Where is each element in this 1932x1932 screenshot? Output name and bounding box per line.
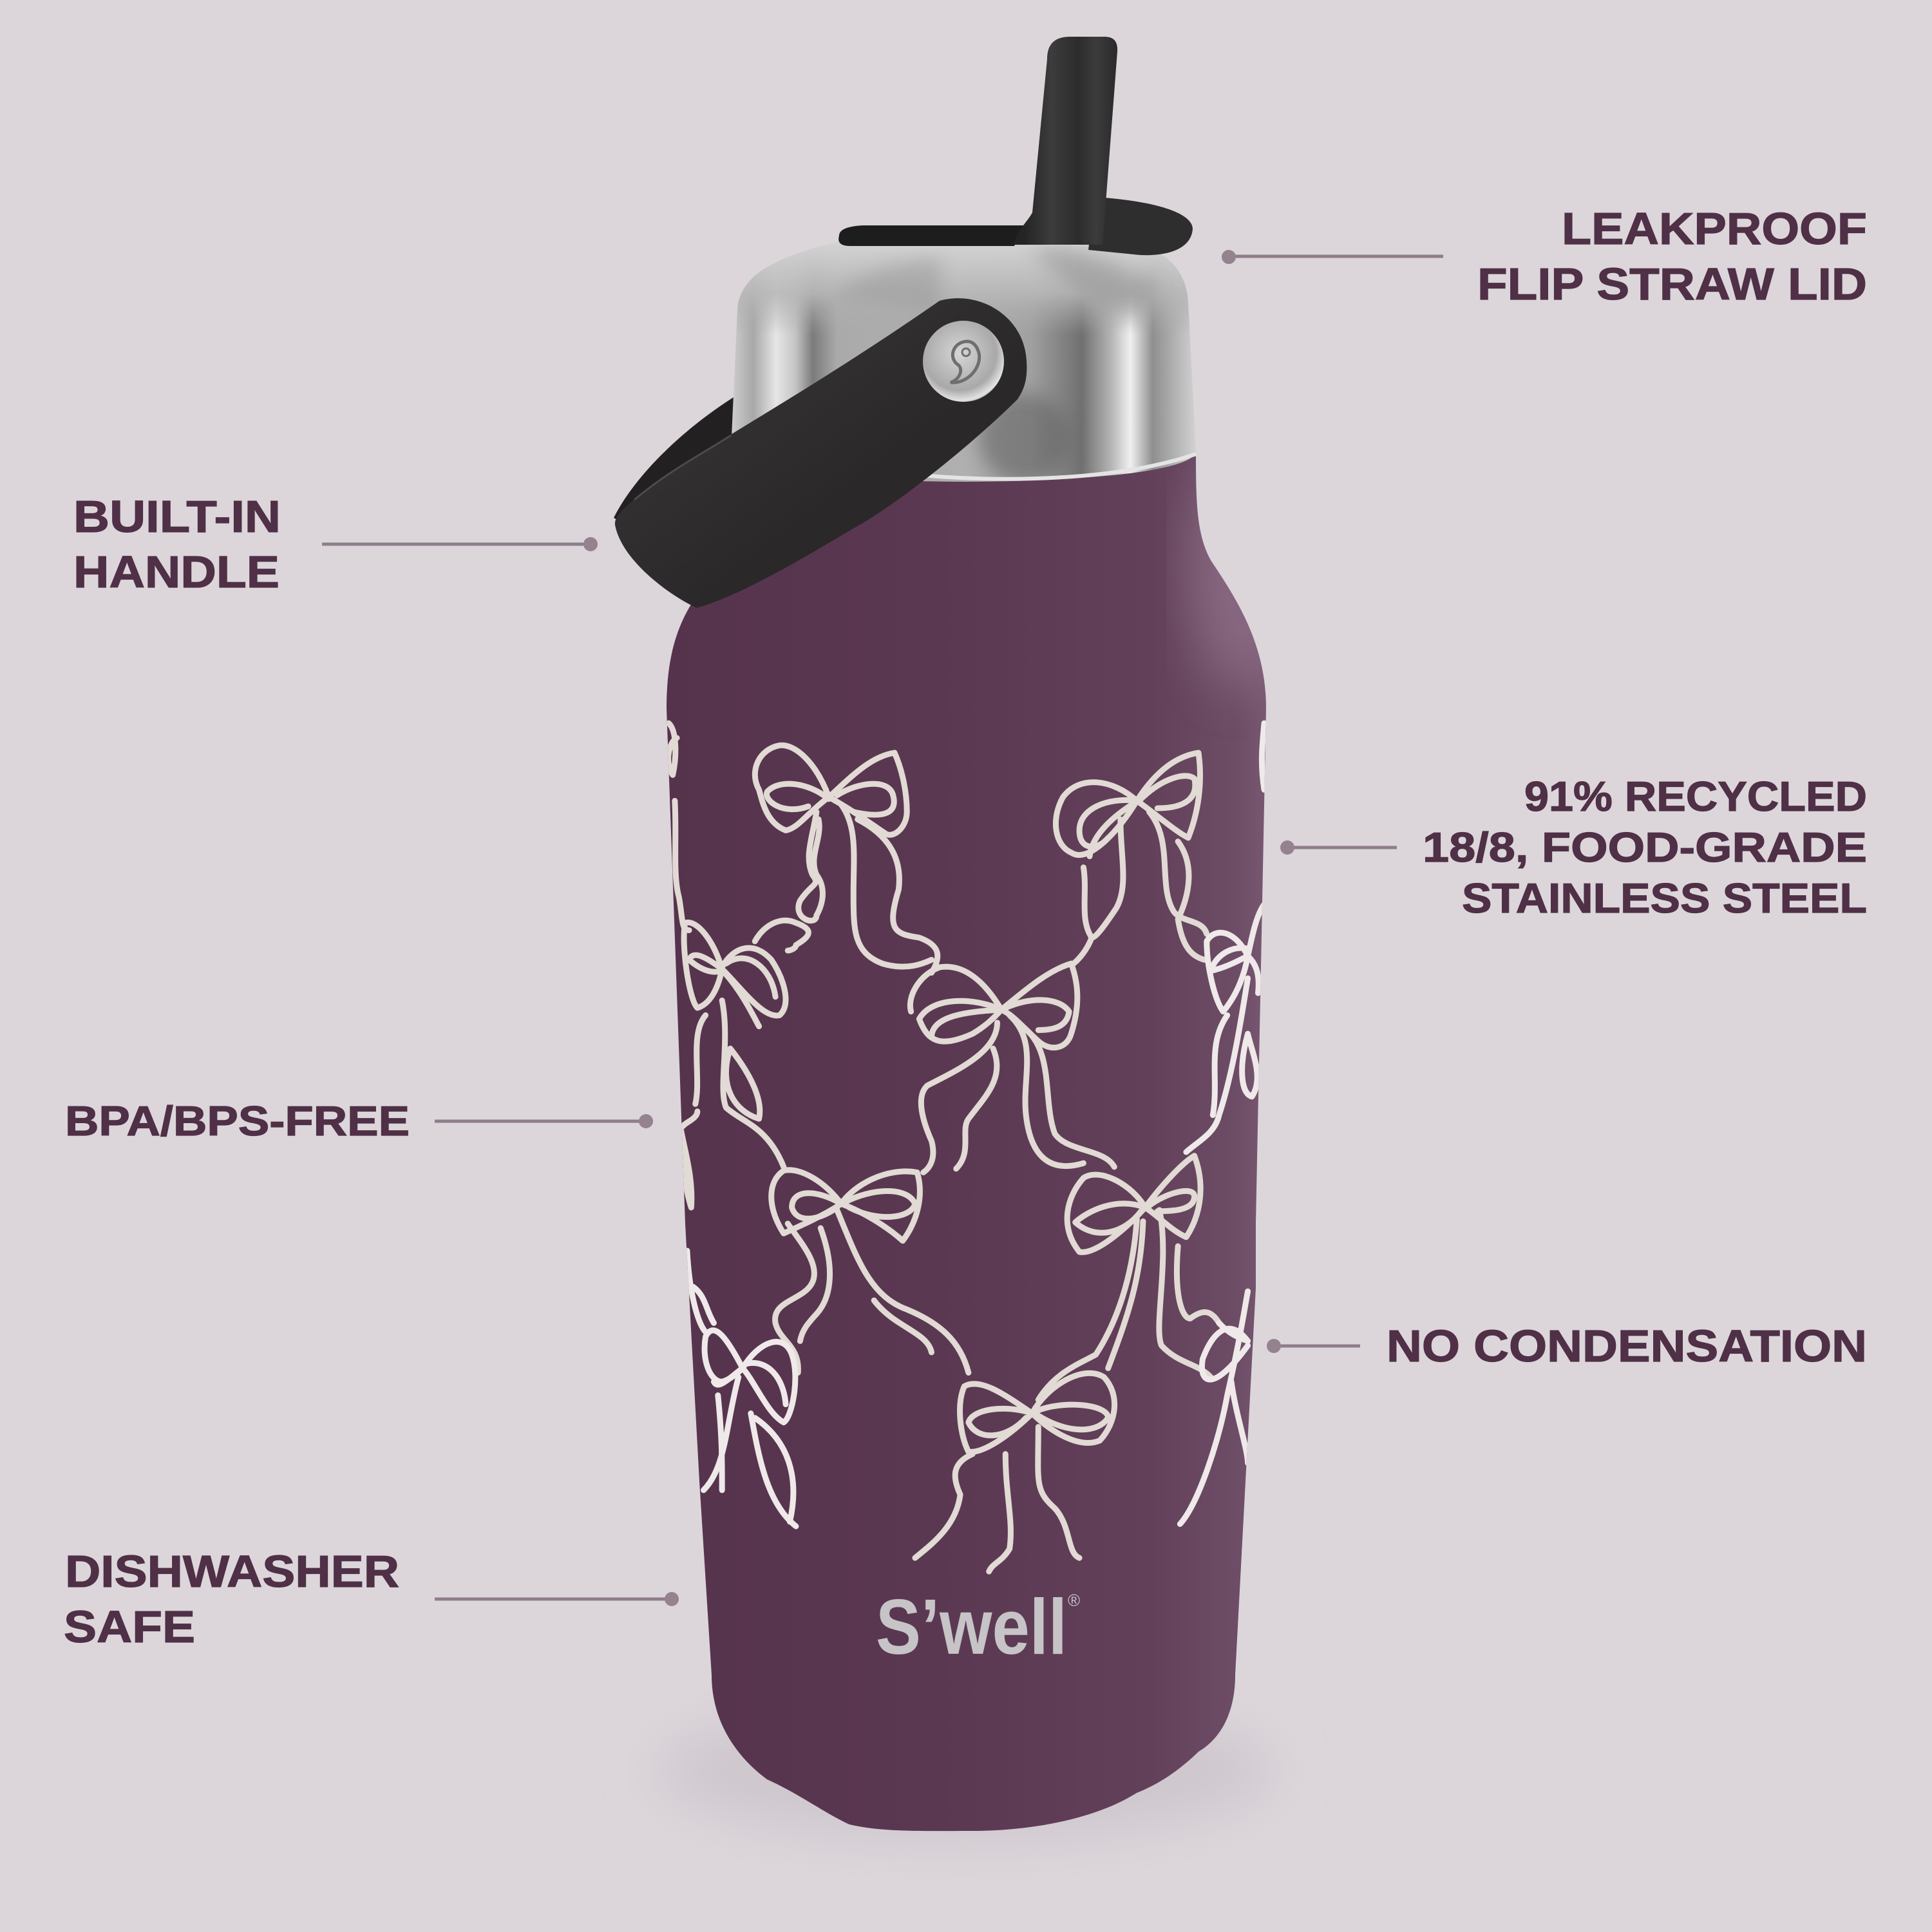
handle front strap (615, 298, 1027, 608)
callout line (1267, 1339, 1360, 1353)
brand logo: ® (1068, 1591, 1080, 1610)
label: no condensation (1267, 1321, 1867, 1371)
bow: top left (755, 745, 938, 972)
lid slot (838, 225, 1024, 246)
bow pattern (668, 723, 1264, 1571)
label text: BUILT-IN (73, 491, 281, 542)
label text (1477, 204, 1867, 309)
label text (64, 1546, 399, 1652)
ground shadow (657, 1700, 1275, 1842)
label text: FLIP STRAW LID (1477, 259, 1867, 309)
label: recycled stainless steel (1280, 773, 1867, 922)
callout line (1222, 250, 1443, 264)
rivet (923, 321, 1004, 402)
flip straw tab (1088, 197, 1193, 255)
bow: lower left (687, 1251, 796, 1526)
bow: middle right (1038, 1156, 1219, 1400)
label text: LEAKPROOF (1562, 204, 1867, 254)
handle edge highlight (634, 435, 731, 500)
label text: 18/8, FOOD-GRADE (1423, 824, 1867, 871)
label: leakproof flip straw lid (1222, 204, 1867, 309)
label text: NO CONDENSATION (1387, 1321, 1867, 1371)
label text: BPA/BPS-FREE (65, 1097, 410, 1144)
steel cap (731, 242, 1196, 483)
bow: top right (1056, 753, 1207, 965)
label text: 91% RECYCLED (1524, 773, 1867, 820)
bow: right edge upper (1186, 723, 1264, 1152)
shoulder highlight (1172, 470, 1264, 693)
bow: centre (910, 963, 1114, 1172)
label text: DISHWASHER (65, 1546, 399, 1596)
label: bpa/bps-free (65, 1097, 653, 1144)
bow: right edge lower (1180, 1291, 1248, 1524)
bottle illustration (614, 37, 1298, 1842)
label text (73, 491, 281, 597)
handle back strap (614, 393, 747, 541)
label text (1423, 773, 1867, 922)
callout line (1280, 840, 1397, 855)
callout line (322, 537, 598, 551)
bow: bottom centre (915, 1373, 1115, 1571)
label text: HANDLE (73, 547, 279, 597)
callout line (435, 1114, 653, 1128)
bow: middle left (772, 1170, 969, 1372)
callout line (435, 1592, 679, 1606)
label text: SAFE (64, 1602, 195, 1652)
label: built-in handle (73, 491, 598, 597)
straw (1013, 37, 1117, 245)
brand logo: S’well (876, 1583, 1067, 1671)
label text: STAINLESS STEEL (1462, 875, 1867, 922)
bow: left side (668, 723, 786, 1208)
bottle body (667, 454, 1266, 1831)
label: dishwasher safe (64, 1546, 679, 1652)
